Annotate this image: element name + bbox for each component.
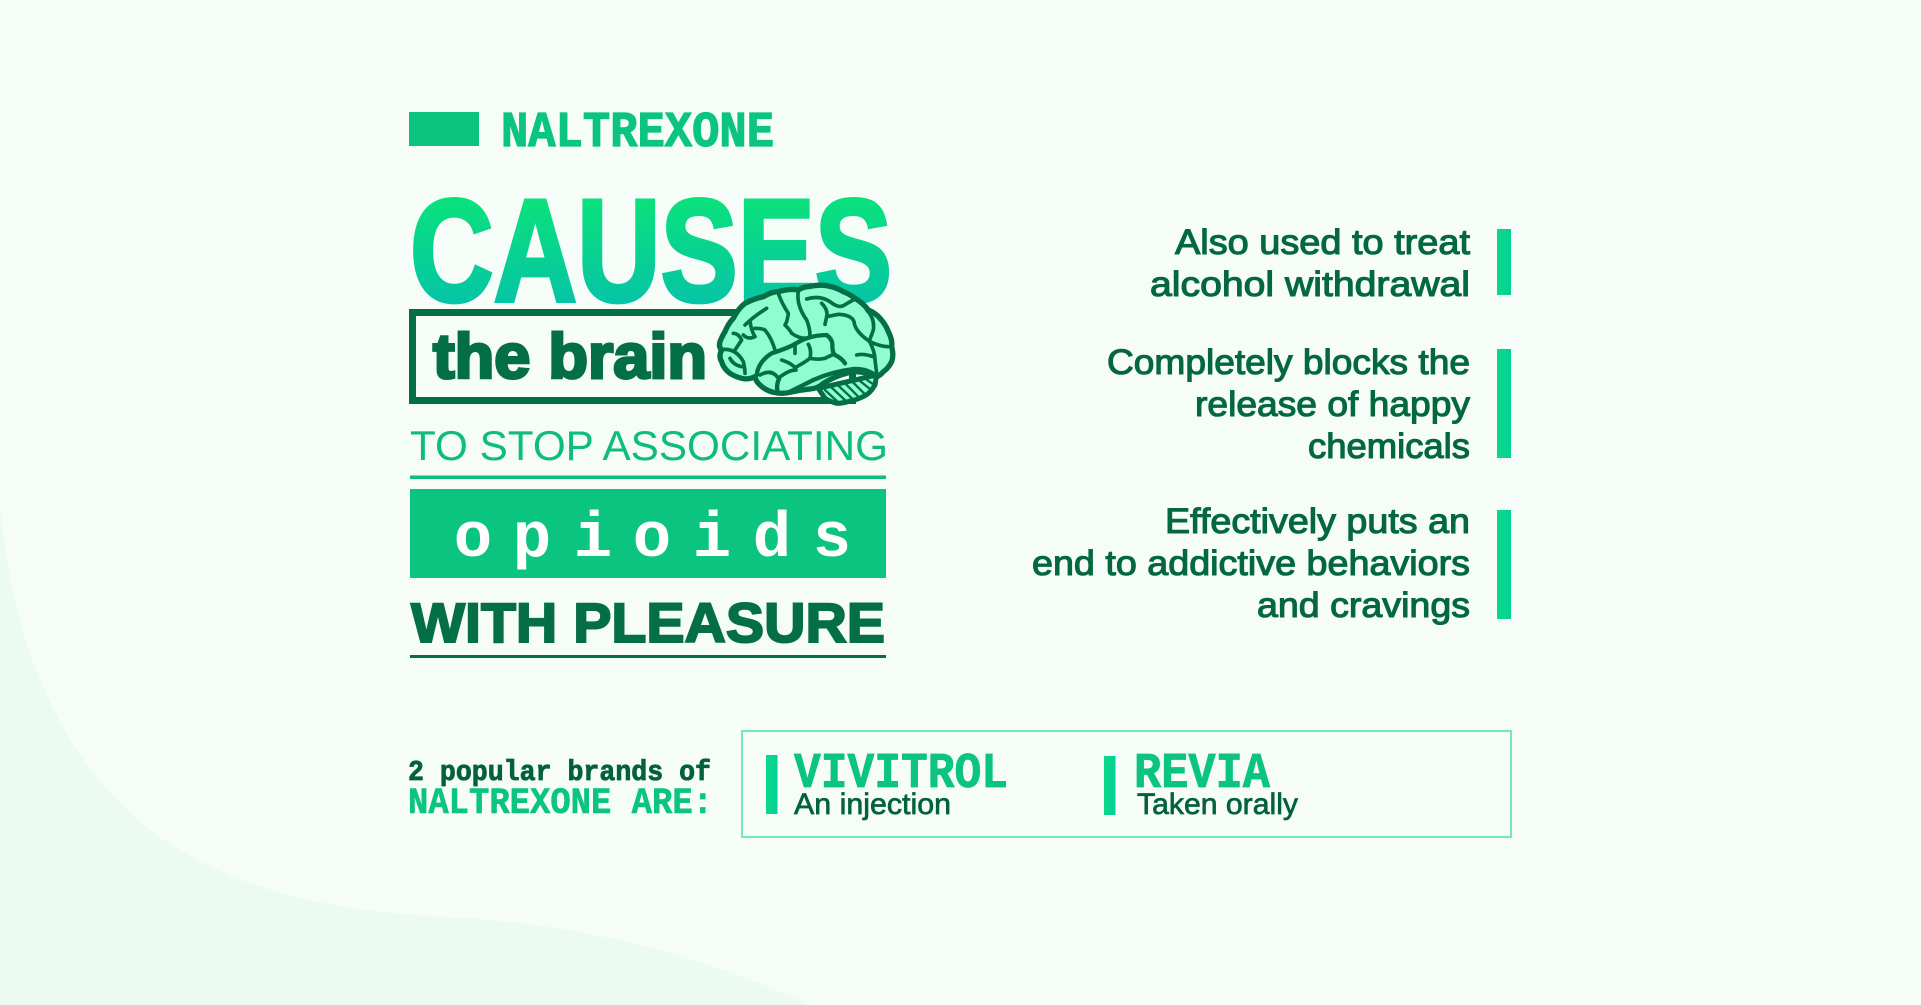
brand: revia: REVIA: [1134, 746, 1270, 803]
brands label: [408, 756, 713, 825]
fact: ends addictive behaviors: end to addictive behaviors: [1032, 544, 1470, 583]
fact: ends addictive behaviors: Effectively puts an: [1165, 502, 1470, 541]
fact: alcohol withdrawal: alcohol withdrawal: [1150, 265, 1470, 304]
brand: vivitrol: An injection: [794, 788, 951, 821]
the brain box: [412, 312, 852, 400]
brands label: 2 popular brands of: [408, 756, 711, 789]
brand: revia: [1104, 746, 1298, 821]
brand: vivitrol: [766, 746, 1008, 821]
icon: brain: [719, 285, 893, 403]
fact: blocks happy chemicals: release of happy: [1195, 385, 1471, 424]
brand: revia: Taken orally: [1137, 788, 1298, 821]
the brain box: the brain: [433, 322, 707, 392]
naltrexone label: [409, 105, 774, 162]
fact: ends addictive behaviors: and cravings: [1257, 586, 1470, 625]
naltrexone label: NALTREXONE: [501, 105, 774, 162]
fact: blocks happy chemicals: [1107, 343, 1511, 466]
banner: opioids: opioids: [454, 504, 851, 576]
banner: opioids: [410, 489, 886, 578]
fact: alcohol withdrawal: Also used to treat: [1175, 223, 1470, 262]
fact: ends addictive behaviors: [1032, 502, 1511, 625]
heading: causes: CAUSES: [410, 169, 892, 332]
panel: brands: [742, 731, 1511, 837]
subheading: to stop associating: TO STOP ASSOCIATING: [410, 422, 888, 469]
heading: with pleasure: WITH PLEASURE: [411, 591, 885, 654]
fact: blocks happy chemicals: chemicals: [1308, 427, 1470, 466]
fact: blocks happy chemicals: Completely blocks the: [1107, 343, 1470, 382]
fact: alcohol withdrawal: [1150, 223, 1511, 304]
brand: vivitrol: VIVITROL: [794, 746, 1008, 803]
brands label: NALTREXONE ARE:: [408, 783, 713, 825]
